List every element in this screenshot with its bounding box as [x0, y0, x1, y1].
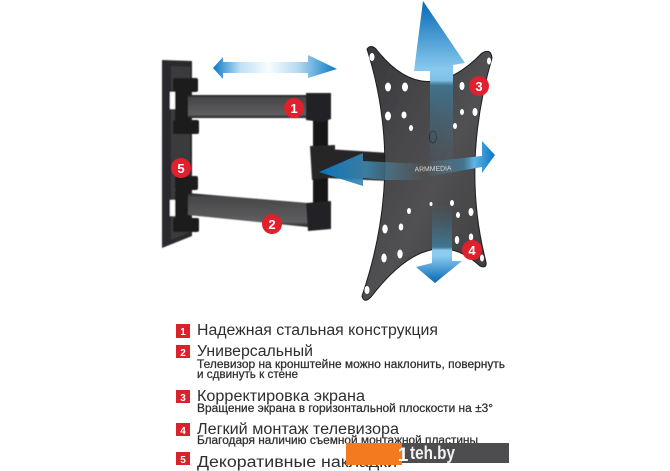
- upper arm joint: [306, 93, 331, 122]
- banner dark part: [400, 443, 509, 463]
- movement arrows: [213, 1, 495, 283]
- badge 4: [462, 240, 482, 260]
- arrow: horizontal swing: [213, 55, 337, 79]
- wall bracket arm assembly: [162, 60, 390, 248]
- item 5: Декоративные накладки: [197, 454, 397, 471]
- numbered badges on the picture: [171, 76, 489, 260]
- wall plate inner strip: [171, 66, 190, 240]
- item 3: 3: [180, 393, 186, 404]
- badge 2: [262, 214, 282, 234]
- TV mounting plate: [362, 46, 492, 300]
- item 3: [176, 388, 493, 415]
- item 2: и сдвинуть к стене: [197, 369, 298, 381]
- item 2: 2: [180, 348, 186, 359]
- item 2: [176, 343, 505, 381]
- item 2: Универсальный: [197, 343, 313, 360]
- watermark banner: [346, 443, 509, 466]
- badge 5: 5: [177, 161, 185, 176]
- wall plate: [162, 60, 192, 248]
- badge 3: [469, 76, 489, 96]
- item 5: 5: [180, 455, 186, 466]
- arrow: tilt down: [416, 205, 462, 283]
- center joint: [310, 145, 335, 180]
- item 3: Корректировка экрана: [197, 388, 365, 405]
- upper arm: [188, 95, 308, 118]
- badge 5: [171, 158, 191, 178]
- item 4: 4: [180, 426, 186, 437]
- plate support arm: [327, 149, 390, 181]
- item 1: 1: [180, 327, 186, 338]
- lower arm joint: [306, 201, 331, 231]
- plate shape: [362, 46, 492, 300]
- center hole: [430, 131, 436, 143]
- item 4: Легкий монтаж телевизора: [197, 421, 399, 438]
- brand label on plate: ARMMEDIA: [414, 165, 452, 174]
- badge 2: 2: [268, 217, 276, 232]
- badge 1: 1: [290, 101, 298, 116]
- item 4: [176, 421, 478, 447]
- item 1: Надежная стальная конструкция: [197, 322, 438, 339]
- mounting holes: [364, 53, 491, 294]
- lower hinge: [170, 176, 199, 232]
- lower arm: [188, 193, 308, 227]
- arrow: tilt up: [414, 1, 465, 170]
- item 4: Благодаря наличию съемной монтажной пластины: [197, 435, 478, 447]
- badge 1: [284, 98, 304, 118]
- vertical post: [313, 118, 328, 206]
- item 2: Телевизор на кронштейне можно наклонить, повернуть: [197, 359, 505, 371]
- badge 3: 3: [475, 79, 483, 94]
- banner text: teh.by: [410, 443, 455, 463]
- badge 4: 4: [468, 243, 476, 258]
- arrow: retract left: [319, 153, 425, 186]
- feature list: [176, 322, 505, 471]
- upper hinge: [170, 78, 199, 134]
- banner numeral: 1: [398, 445, 409, 466]
- item 3: Вращение экрана в горизонтальной плоскости на ±3°: [197, 403, 493, 415]
- banner orange part: [346, 443, 402, 465]
- arrow: extend right: [425, 141, 495, 177]
